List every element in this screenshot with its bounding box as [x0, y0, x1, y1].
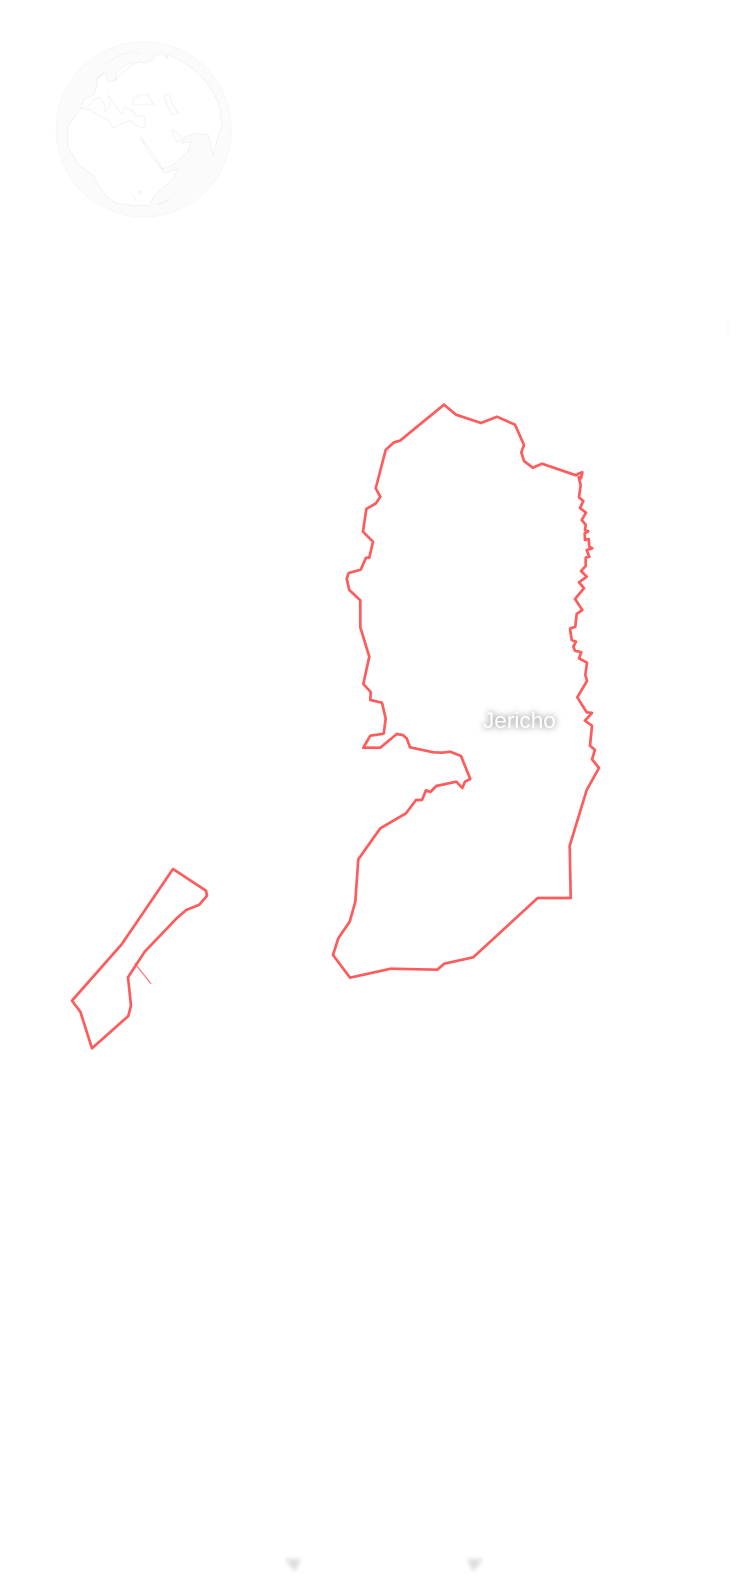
- faint mark: bottom right: [467, 1559, 483, 1572]
- map: West Bank outline: [333, 405, 599, 978]
- faint mark: right edge: [727, 320, 729, 334]
- label: Jericho: Jericho: [483, 708, 556, 733]
- icon: globe: [56, 42, 231, 217]
- globe land masses: [68, 52, 222, 206]
- faint mark: bottom left: [285, 1559, 301, 1572]
- map: Gaza Strip outline: [72, 869, 207, 1048]
